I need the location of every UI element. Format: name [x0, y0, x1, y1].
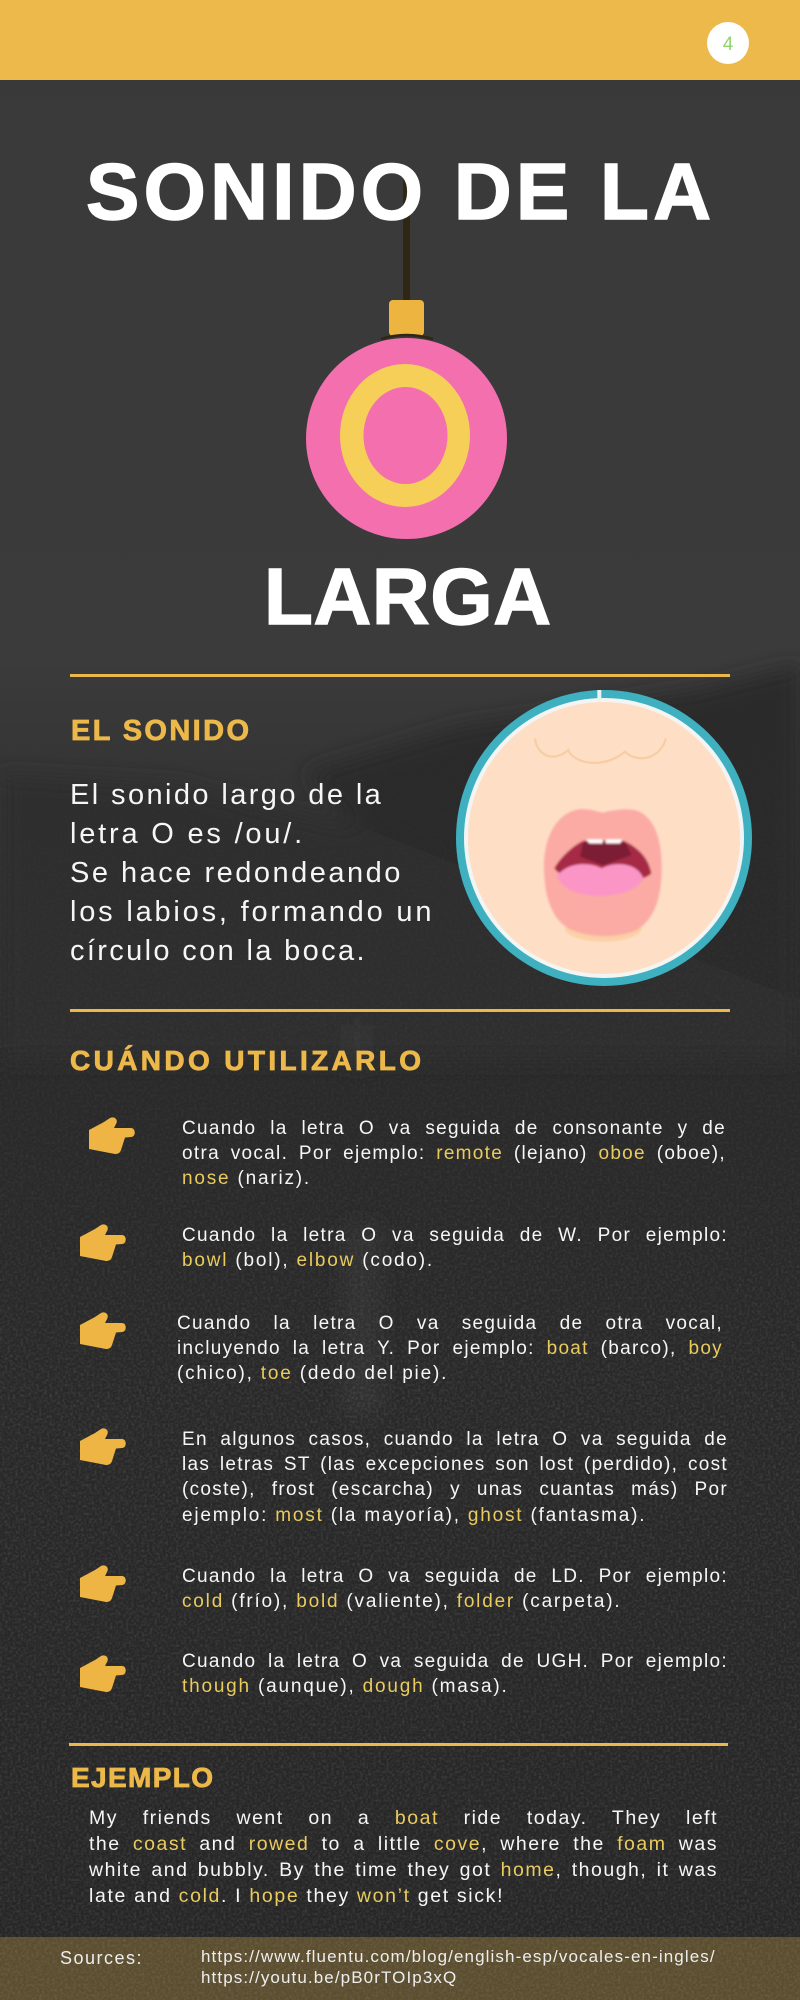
rule 5 text: [182, 1566, 728, 1612]
rule 4 text: [182, 1429, 728, 1526]
sound description text: [70, 779, 434, 967]
heading: cuando utilizarlo: CUÁNDO UTILIZARLO: [70, 1045, 421, 1076]
sound description text: El sonido largo de la: [70, 779, 383, 811]
page number badge: [707, 22, 749, 64]
example paragraph: [89, 1807, 718, 1907]
rule 4 text: (coste), frost (escarcha) y unas cuantas más) Por: [182, 1479, 728, 1500]
hand icons: [80, 1117, 135, 1692]
icon: pointing hand 5: [80, 1565, 126, 1602]
heading: ejemplo: EJEMPLO: [71, 1762, 213, 1793]
rule 1 text: [182, 1118, 726, 1189]
top banner: [0, 0, 800, 80]
title: [86, 147, 711, 641]
heading: el sonido: EL SONIDO: [71, 715, 249, 747]
rule 3 text: incluyendo la letra Y. Por ejemplo: boat (barco), boy: [177, 1338, 723, 1359]
rule 2 text: [182, 1225, 728, 1271]
example paragraph: white and bubbly. By the time they got home, though, it was: [89, 1859, 718, 1881]
icon: pointing hand 6: [80, 1655, 126, 1692]
sound description text: Se hace redondeando: [70, 857, 403, 889]
rule 6 text: [182, 1651, 728, 1697]
icon: pointing hand 1: [89, 1117, 135, 1154]
icon: pointing hand 4: [80, 1428, 126, 1465]
source links: https://youtu.be/pB0rTOIp3xQ: [201, 1968, 457, 1987]
icon: pointing hand 2: [80, 1224, 126, 1261]
rule 1 text: Cuando la letra O va seguida de consonante y de: [182, 1118, 726, 1139]
ornament: hanging pink O bauble: [306, 175, 507, 539]
title: LARGA: [264, 552, 551, 641]
page number badge: 4: [723, 34, 734, 55]
sound description text: círculo con la boca.: [70, 935, 367, 967]
example paragraph: late and cold. I hope they won’t get sick!: [89, 1885, 504, 1907]
footer band: [0, 1937, 800, 2000]
rule 2 text: Cuando la letra O va seguida de W. Por ejemplo:: [182, 1225, 728, 1246]
illustration: open mouth in circle: [456, 690, 752, 986]
rule 4 text: ejemplo: most (la mayoría), ghost (fantasma).: [182, 1505, 646, 1526]
sound description text: letra O es /ou/.: [70, 818, 305, 850]
example paragraph: My friends went on a boat ride today. They left: [89, 1807, 718, 1829]
title: SONIDO DE LA: [86, 147, 711, 236]
example paragraph: the coast and rowed to a little cove, where the foam was: [89, 1833, 718, 1855]
icon: pointing hand 3: [80, 1312, 126, 1349]
rule 1 text: nose (nariz).: [182, 1168, 311, 1189]
rule 6 text: Cuando la letra O va seguida de UGH. Por ejemplo:: [182, 1651, 728, 1672]
rule 2 text: bowl (bol), elbow (codo).: [182, 1250, 434, 1271]
rule 4 text: las letras ST (las excepciones son lost (perdido), cost: [182, 1454, 728, 1475]
sound description text: los labios, formando un: [70, 896, 434, 928]
rule 5 text: Cuando la letra O va seguida de LD. Por ejemplo:: [182, 1566, 728, 1587]
rule 6 text: though (aunque), dough (masa).: [182, 1676, 509, 1697]
rule 5 text: cold (frío), bold (valiente), folder (carpeta).: [182, 1591, 621, 1612]
sources label: Sources:: [60, 1948, 143, 1968]
rule 1 text: otra vocal. Por ejemplo: remote (lejano) oboe (oboe),: [182, 1143, 726, 1164]
source links: https://www.fluentu.com/blog/english-esp/vocales-en-ingles/: [201, 1947, 716, 1966]
rule 4 text: En algunos casos, cuando la letra O va seguida de: [182, 1429, 728, 1450]
rule 3 text: Cuando la letra O va seguida de otra vocal,: [177, 1313, 723, 1334]
divider lines: [69, 674, 730, 1746]
rule 3 text: (chico), toe (dedo del pie).: [177, 1363, 448, 1384]
source links: [201, 1947, 716, 1987]
rule 3 text: [177, 1313, 723, 1384]
